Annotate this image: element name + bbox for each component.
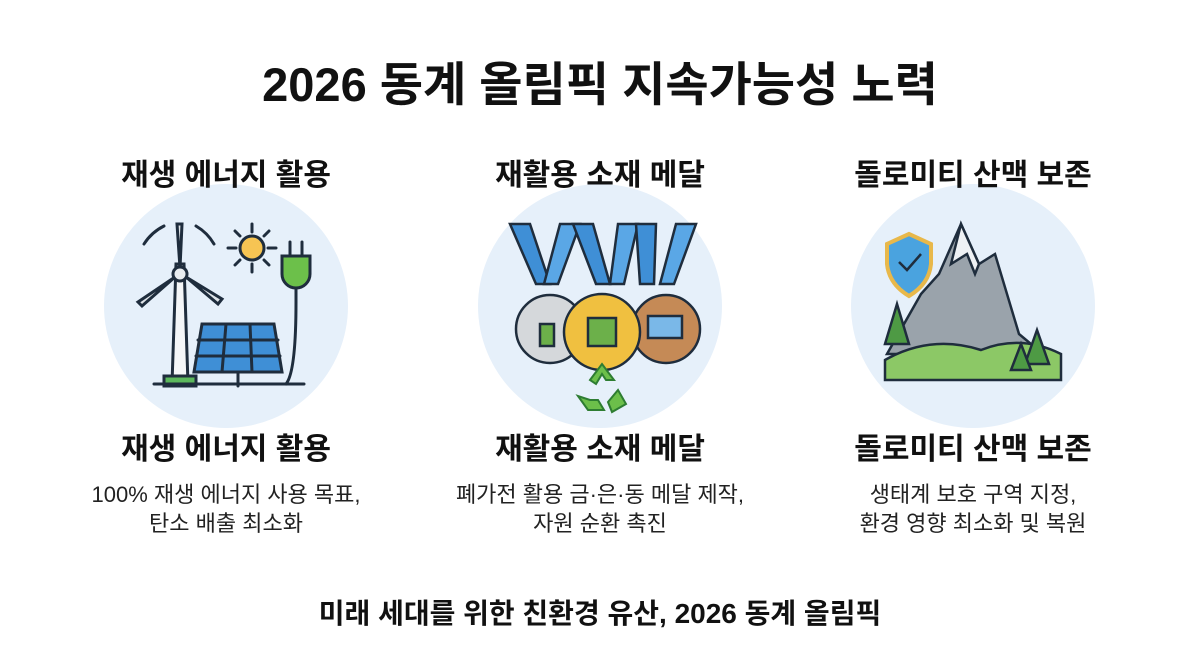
footer: 미래 세대를 위한 친환경 유산, 2026 동계 올림픽 [319,598,881,629]
description: 생태계 보호 구역 지정, [870,482,1076,507]
icon: wind turbine and solar [104,184,348,428]
description [456,482,744,536]
heading bottom: 돌로미티 산맥 보존 [854,433,1092,466]
panel: renewable energy [92,159,360,536]
description [92,482,360,536]
heading top: 재활용 소재 메달 [495,159,705,192]
description: 100% 재생 에너지 사용 목표, [92,482,360,507]
icon: mountain [851,184,1095,428]
icon: medals [478,184,722,428]
description: 환경 영향 최소화 및 복원 [860,511,1086,536]
heading bottom: 재생 에너지 활용 [121,433,331,466]
panel: dolomites [854,159,1092,536]
description: 폐가전 활용 금·은·동 메달 제작, [456,482,744,507]
heading top: 돌로미티 산맥 보존 [854,159,1092,192]
description: 자원 순환 촉진 [533,511,667,536]
heading bottom: 재활용 소재 메달 [495,433,705,466]
title: 2026 동계 올림픽 지속가능성 노력 [262,58,938,111]
description: 탄소 배출 최소화 [149,511,303,536]
description [860,482,1086,536]
panel: recycled medals [456,159,744,536]
heading top: 재생 에너지 활용 [121,159,331,192]
